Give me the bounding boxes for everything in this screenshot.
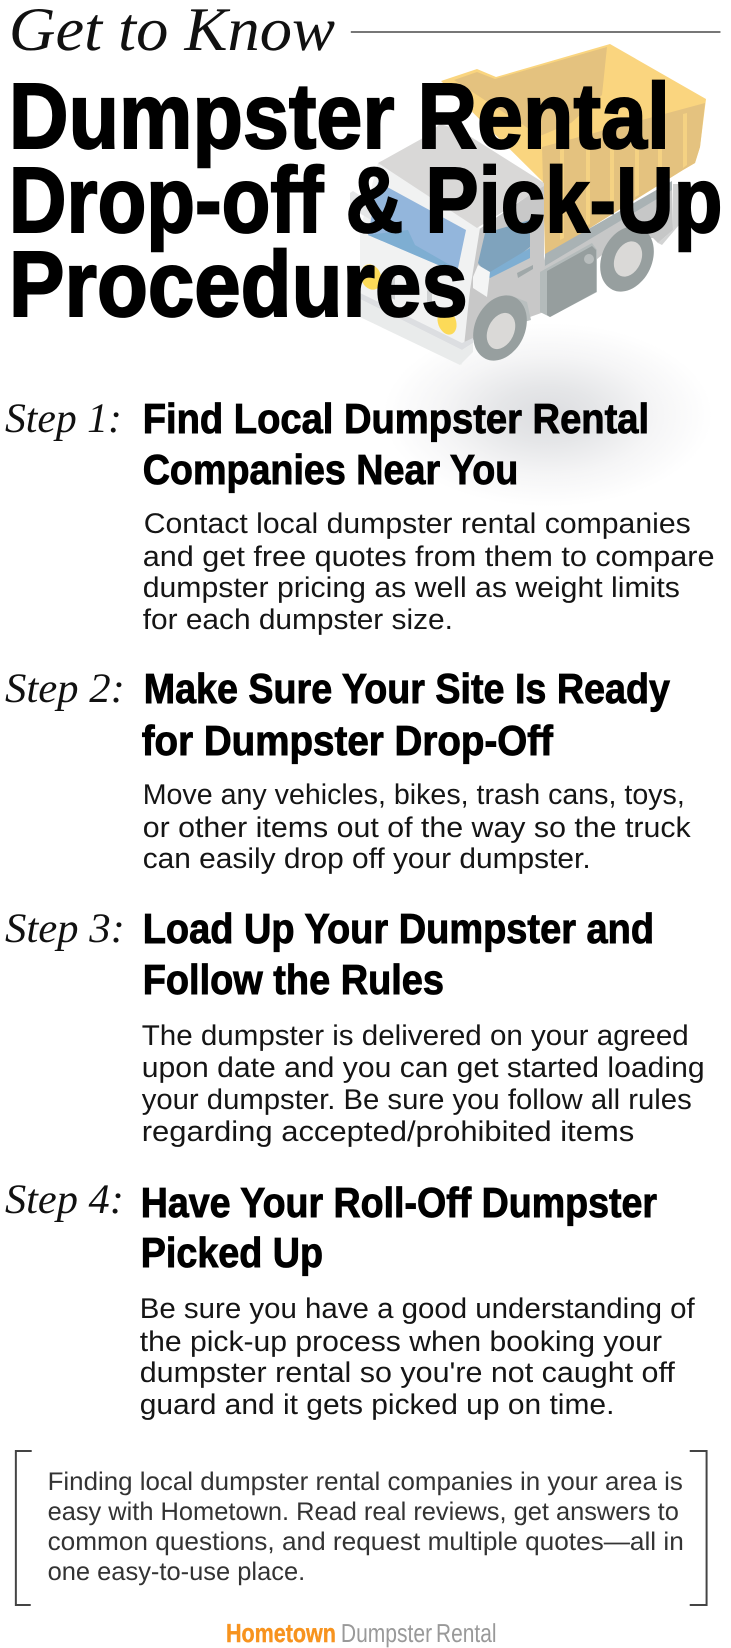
step 2 heading: Make Sure Your Site Is Ready xyxy=(144,665,670,712)
step 4 heading xyxy=(141,1179,657,1276)
panel: step 1 xyxy=(5,395,715,636)
title block xyxy=(9,0,722,336)
logo: Hometown Dumpster Rental: Dumpster xyxy=(341,1618,432,1648)
step 2 heading: for Dumpster Drop-Off xyxy=(142,717,554,764)
callout text: easy with Hometown. Read real reviews, get answers to xyxy=(48,1498,679,1526)
step 2 body text xyxy=(143,779,692,875)
step 3 heading: Follow the Rules xyxy=(143,956,444,1003)
panel: step 3 xyxy=(5,905,705,1148)
step 3 body text: The dumpster is delivered on your agreed xyxy=(142,1020,689,1052)
step 4 body text: dumpster rental so you're not caught off xyxy=(140,1357,675,1389)
step 4 heading: Picked Up xyxy=(141,1229,323,1276)
kicker rule xyxy=(351,31,720,33)
step 1 heading xyxy=(143,395,649,493)
step 2 body text: or other items out of the way so the truck xyxy=(143,812,692,844)
step 1 body text xyxy=(143,508,715,636)
callout text: common questions, and request multiple quotes—all in xyxy=(48,1528,684,1556)
callout text xyxy=(48,1468,684,1586)
heading line 1: Dumpster Rental xyxy=(9,64,670,168)
step 4 heading: Have Your Roll-Off Dumpster xyxy=(141,1179,657,1226)
right bracket xyxy=(690,1451,707,1605)
step 4 body text xyxy=(140,1293,695,1421)
callout text: one easy-to-use place. xyxy=(48,1558,305,1586)
step 2 body text: Move any vehicles, bikes, trash cans, toys, xyxy=(143,779,685,811)
panel: step 4 xyxy=(5,1177,695,1421)
panel: step 2 xyxy=(5,665,692,875)
step 3 label: Step 3: xyxy=(5,906,125,952)
step 2 body text: can easily drop off your dumpster. xyxy=(143,843,591,875)
step 1 label: Step 1: xyxy=(5,396,122,442)
step 3 body text xyxy=(142,1020,705,1148)
step 2 heading xyxy=(142,665,670,764)
heading line 3: Procedures xyxy=(9,232,468,336)
icon: dump truck xyxy=(350,44,706,369)
step 1 body text: and get free quotes from them to compare xyxy=(143,541,715,573)
left bracket xyxy=(16,1451,32,1605)
step 4 body text: the pick-up process when booking your xyxy=(140,1326,663,1358)
step 3 heading xyxy=(143,905,654,1003)
callout text: Finding local dumpster rental companies in your area is xyxy=(48,1468,683,1496)
step 4 body text: Be sure you have a good understanding of xyxy=(140,1293,695,1325)
logo: Hometown Dumpster Rental xyxy=(226,1618,496,1648)
step 3 body text: upon date and you can get started loading xyxy=(142,1052,705,1084)
step 1 heading: Companies Near You xyxy=(143,446,518,493)
step 2 label: Step 2: xyxy=(5,666,125,712)
step 1 body text: Contact local dumpster rental companies xyxy=(144,508,691,540)
step 3 heading: Load Up Your Dumpster and xyxy=(143,905,654,952)
step 1 heading: Find Local Dumpster Rental xyxy=(143,395,649,442)
step 1 body text: dumpster pricing as well as weight limits xyxy=(143,572,680,604)
truck shadow xyxy=(383,323,713,507)
step 3 body text: regarding accepted/prohibited items xyxy=(142,1116,634,1148)
callout: Hometown note in brackets xyxy=(16,1451,707,1605)
step 1 body text: for each dumpster size. xyxy=(143,604,453,636)
step 3 body text: your dumpster. Be sure you follow all rules xyxy=(142,1084,692,1116)
step 4 label: Step 4: xyxy=(5,1177,124,1223)
step 4 body text: guard and it gets picked up on time. xyxy=(140,1389,614,1421)
logo: Hometown Dumpster Rental: Rental xyxy=(436,1618,496,1648)
logo: Hometown Dumpster Rental: Hometown xyxy=(226,1618,336,1648)
